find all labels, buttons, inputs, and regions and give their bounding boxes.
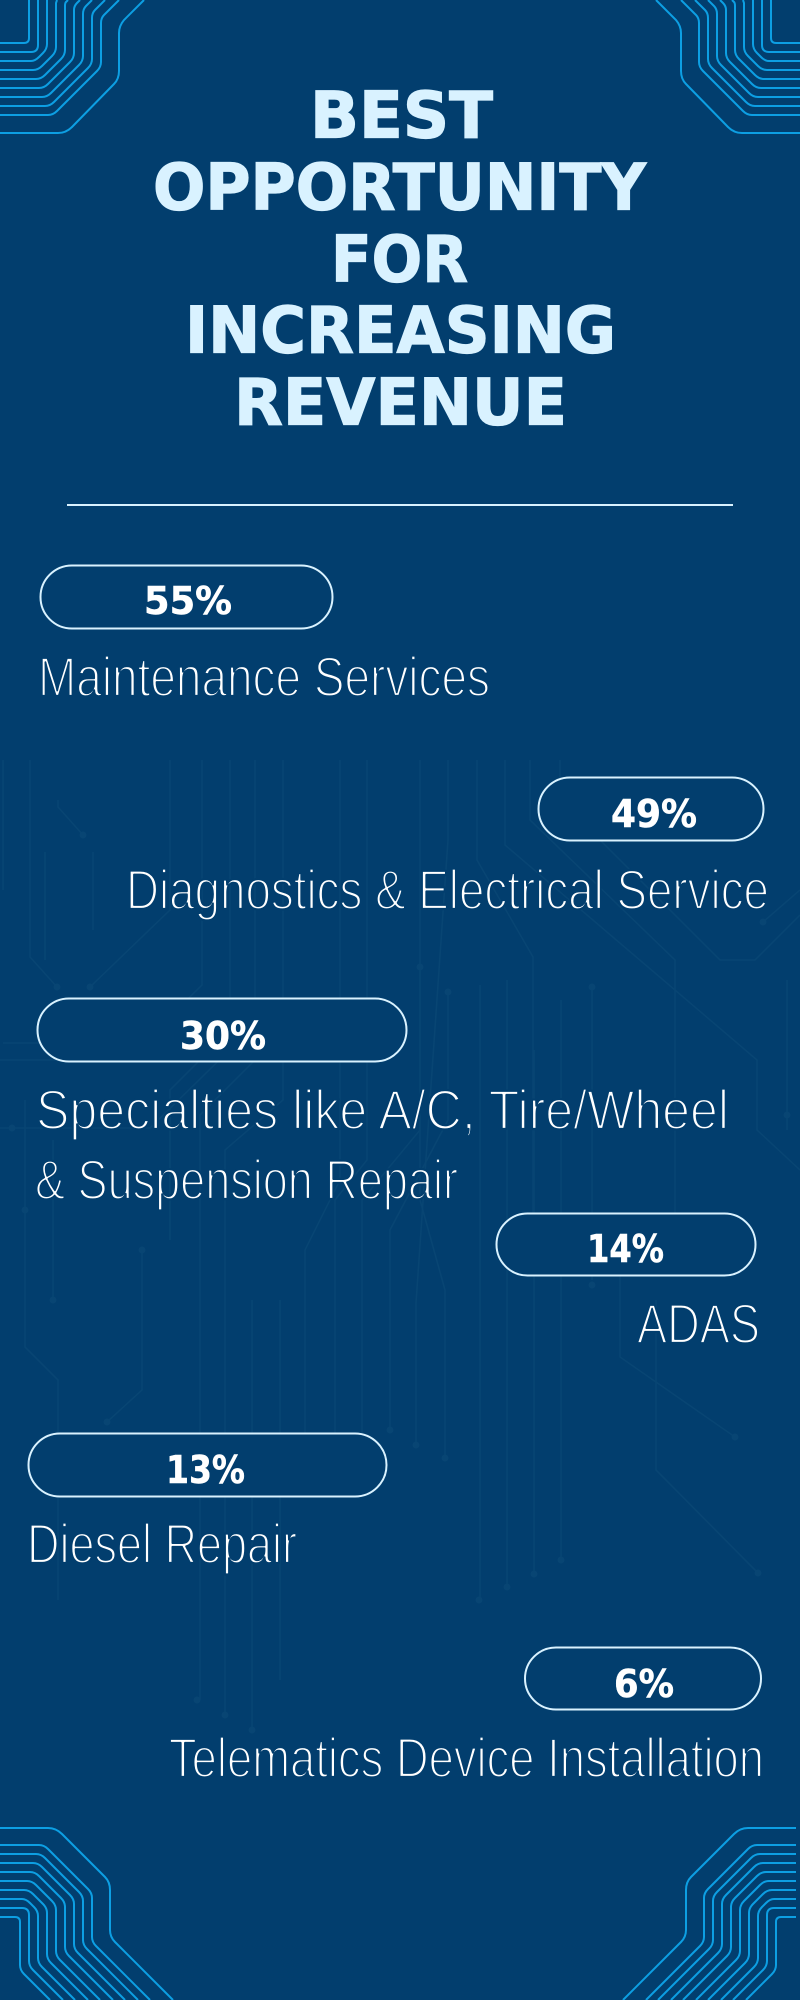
corner circuit: top left [0,0,144,133]
pill: 6% [525,1648,761,1710]
pill: 14%: 14% [587,1227,664,1271]
label: ADAS: ADAS [637,1293,760,1355]
label: Specialties like A/C, Tire/Wheel & Suspension Repair [35,1079,729,1211]
title: FOR [331,224,468,298]
label: Maintenance Services: Maintenance Services [38,646,490,708]
pill: 49%: 49% [611,792,697,836]
label: Specialties like A/C, Tire/Wheel & Suspension Repair: & Suspension Repair [35,1149,458,1211]
pill: 14% [496,1214,756,1276]
corner circuit: bottom right [623,1828,796,2000]
pill: 6%: 6% [614,1662,674,1706]
item: 55% Maintenance Services [38,566,490,708]
item: 13% Diesel Repair [27,1434,386,1575]
title [153,80,647,440]
item: 6% Telematics Device Installation [169,1648,764,1789]
background circuit pattern [0,760,800,1734]
title: INCREASING [185,294,616,368]
corner circuit: bottom left [0,1828,173,2000]
title: REVENUE [234,366,567,440]
corner circuit: top right [656,0,800,133]
title: OPPORTUNITY [153,152,647,226]
label: Diesel Repair: Diesel Repair [27,1513,297,1575]
pill: 30%: 30% [180,1014,266,1058]
item: 14% ADAS [496,1214,760,1355]
pill: 30% [38,998,406,1062]
pill: 49% [538,778,764,840]
item: 49% Diagnostics & Electrical Service [126,778,769,921]
pill: 13%: 13% [166,1448,245,1492]
pill: 55% [40,566,332,628]
item: 30% Specialties [35,998,729,1211]
pill: 55%: 55% [144,579,232,623]
title: BEST [310,80,493,154]
pill: 13% [28,1434,386,1496]
label: Specialties like A/C, Tire/Wheel & Suspension Repair: Specialties like A/C, Tire/Wheel [36,1079,729,1141]
